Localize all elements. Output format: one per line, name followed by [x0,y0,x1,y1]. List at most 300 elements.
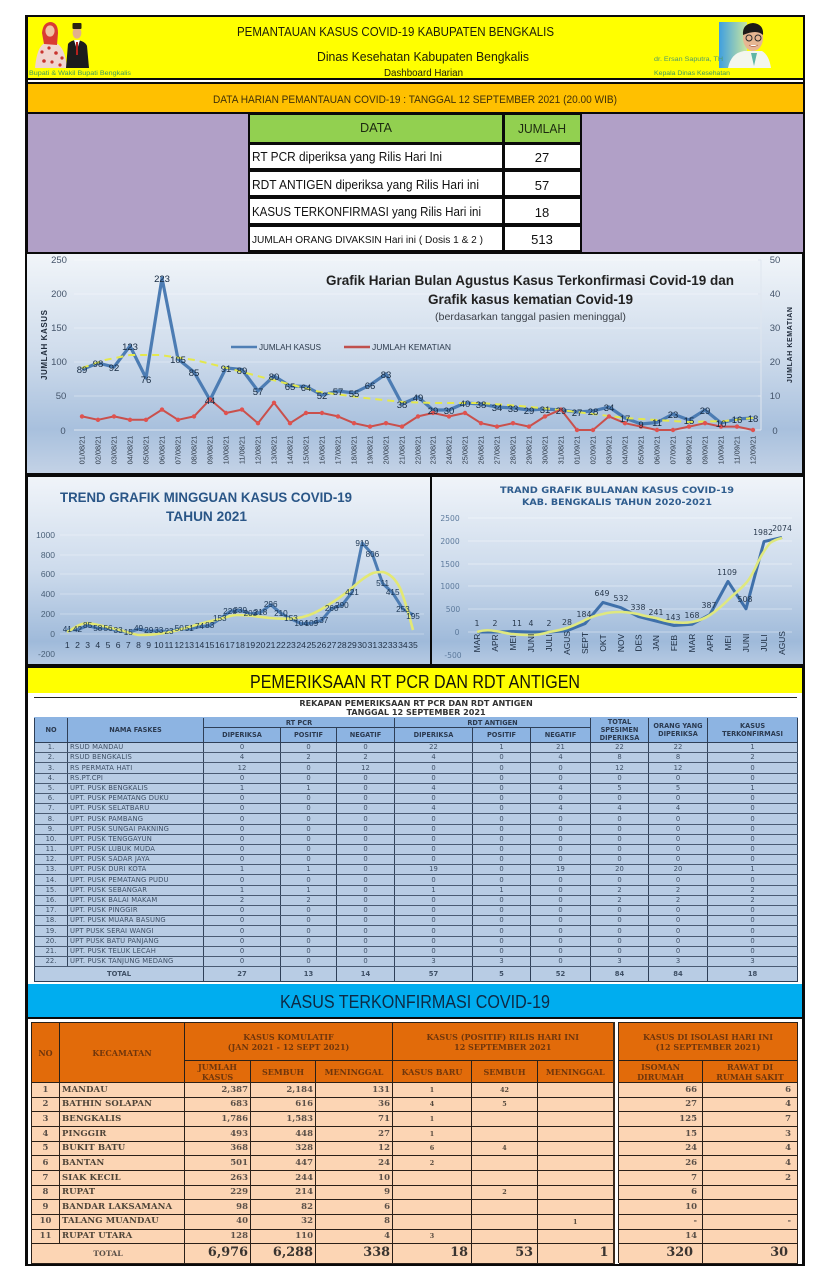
x axis week numbers: 2 [75,640,80,650]
y axis labels: 0 [50,629,55,639]
row: kasus terkonfirmasi: KASUS TERKONFIRMASI yang Rilis Hari ini [252,204,481,219]
data labels: jumlah kasus: 16 [732,415,742,426]
table: rekapan pemeriksaan: 0 [750,855,755,863]
data labels: jumlah kasus: 34 [492,403,502,414]
line: trend kasus [82,355,753,422]
table: rekapan pemeriksaan: 84 [615,970,624,978]
panel: daily summary table [28,114,803,252]
table: rekapan pemeriksaan: UPT. PUSK BALAI MAKAM [70,896,157,904]
table: kasus per kecamatan: 14 [685,1231,697,1241]
table: rekapan pemeriksaan: 17. [46,906,56,914]
table: rekapan pemeriksaan: 0 [558,896,563,904]
table: rekapan pemeriksaan: 22. [46,957,56,965]
data labels: weekly: 58 [93,624,103,633]
data labels: weekly: 203 [244,609,258,618]
table: rekapan pemeriksaan: 0 [750,835,755,843]
table: kasus per kecamatan: 1,786 [221,1114,248,1124]
table: rekapan pemeriksaan: 2 [617,896,622,904]
right axis labels: 20 [770,357,780,368]
data labels: weekly: 153 [284,614,298,623]
header band [28,17,803,82]
x axis month labels: JUNI [526,634,536,652]
x axis date labels: 15/08/21 [302,436,310,464]
x axis week numbers: 8 [136,640,141,650]
table: rekapan pemeriksaan: 0 [240,876,244,884]
data labels: weekly: 195 [406,612,420,621]
table: kasus per kecamatan: KASUS (POSITIF) RILIS HARI INI [427,1032,579,1042]
table: rekapan pemeriksaan: 0 [431,927,436,935]
table: rekapan pemeriksaan: 15. [46,886,56,894]
table: rekapan pemeriksaan: 0 [240,906,244,914]
table: rekapan pemeriksaan: 20. [46,937,56,945]
x axis date labels: 03/08/21 [110,436,118,464]
chart title [500,486,734,508]
table: rekapan pemeriksaan: 0 [617,927,622,935]
table: rekapan pemeriksaan: 1 [306,784,311,792]
line: monthly trend [477,538,782,635]
x axis month labels: JULI [759,634,769,652]
x axis week numbers: 28 [337,640,347,650]
legend: jumlah kasus [231,343,321,352]
x axis month labels: AGUS [777,631,787,655]
x axis week numbers: 24 [296,640,306,650]
table: rekapan pemeriksaan: 0 [558,825,563,833]
data labels: weekly: 296 [264,600,278,609]
data labels: monthly: 184 [577,610,591,619]
table: rekapan pemeriksaan: 4 [431,753,436,761]
table: rekapan pemeriksaan: 0 [617,774,622,782]
left axis labels: 250 [51,255,67,266]
caption: bupati: Bupati & Wakil Bupati Bengkalis [29,70,132,77]
table: rekapan pemeriksaan: 0 [499,774,504,782]
y axis labels: -500 [444,651,462,660]
table: rekapan pemeriksaan: 0 [240,947,244,955]
table: rekapan pemeriksaan: 0 [431,814,436,822]
table: rekapan pemeriksaan: 0 [499,855,504,863]
table: kasus per kecamatan: SEMBUH [484,1066,526,1076]
table: rekapan pemeriksaan: NAMA FASKES [109,726,162,734]
table: rekapan pemeriksaan: 4 [558,753,563,761]
y axis labels: 600 [41,569,55,579]
data labels: jumlah kasus: 29 [524,406,534,417]
table: rekapan pemeriksaan: 0 [558,845,563,853]
table: kasus per kecamatan: 328 [295,1143,313,1153]
caption: doctor position: Kepala Dinas Kesehatan [654,70,730,77]
table: kasus per kecamatan: 27 [685,1099,697,1109]
x axis week numbers: 23 [286,640,296,650]
table: kasus per kecamatan: 8 [43,1187,48,1197]
line: monthly cases [477,537,782,632]
data labels: jumlah kasus: 223 [154,274,170,285]
table: rekapan pemeriksaan: 0 [431,906,436,914]
table: rekapan pemeriksaan: 5 [676,784,680,792]
x axis date labels: 16/08/21 [318,436,326,464]
table: kasus per kecamatan: 7 [691,1173,697,1183]
table: rekapan pemeriksaan: 0 [499,927,504,935]
table: rekapan pemeriksaan: 0 [499,906,504,914]
x axis date labels: 09/09/21 [700,436,710,464]
table: rekapan pemeriksaan: 0 [306,804,311,812]
table: rekapan pemeriksaan: 0 [750,774,755,782]
table: rekapan pemeriksaan: UPT. PUSK BENGKALIS [70,784,148,792]
table: rekapan pemeriksaan: 6. [48,794,54,802]
table: rekapan pemeriksaan: 0 [306,957,311,965]
table: rekapan pemeriksaan: 21. [46,947,56,955]
table: rekapan pemeriksaan: 0 [676,876,680,884]
table: kasus per kecamatan: 12 [378,1143,390,1153]
table: rekapan pemeriksaan: 0 [558,794,563,802]
data labels: monthly: 508 [738,595,752,604]
x axis week numbers: 20 [256,640,265,650]
table: rekapan pemeriksaan: 0 [617,825,622,833]
table: kasus per kecamatan: 24 [685,1143,697,1153]
table: rekapan pemeriksaan: 0 [363,845,368,853]
x axis date labels: 03/09/21 [604,436,614,464]
table: rekapan pemeriksaan: 7. [48,804,54,812]
table: rekapan pemeriksaan: 2. [48,753,54,761]
data labels: monthly: 2 [547,619,552,628]
table: rekapan pemeriksaan: 0 [363,947,368,955]
table: rekapan pemeriksaan: 2 [306,753,311,761]
y axis labels: 500 [446,605,460,614]
table: rekapan pemeriksaan: 1. [48,743,54,751]
table: rekapan pemeriksaan: UPT. PUSK MUARA BASUNG [70,916,166,924]
row: jumlah divaksin: 513 [531,232,553,247]
data labels: jumlah kasus: 23 [668,410,678,421]
x axis month labels: NOV [616,634,626,652]
table: rekapan pemeriksaan: 20 [615,865,624,873]
table: kasus per kecamatan: 98 [236,1202,248,1212]
x axis month labels: MAR [472,634,482,652]
table: kasus per kecamatan: 1 [600,1245,609,1260]
data labels: weekly: 33 [114,626,123,635]
table: rekapan pemeriksaan: 0 [558,916,563,924]
row: RDT antigen: RDT ANTIGEN diperiksa yang Rilis Hari ini [252,177,479,192]
table: rekapan pemeriksaan: 0 [499,947,504,955]
table: rekapan pemeriksaan: UPT. PUSK SEBANGAR [70,886,147,894]
x axis date labels: 30/08/21 [540,436,550,464]
table: rekapan pemeriksaan: 0 [750,804,755,812]
table: rekapan pemeriksaan: 0 [306,927,311,935]
table: kasus per kecamatan: BUKIT BATU [62,1143,125,1153]
data labels: weekly: 49 [134,624,143,633]
table: rekapan pemeriksaan: 0 [431,855,436,863]
table: rekapan pemeriksaan: 0 [750,814,755,822]
data labels: jumlah kasus: 83 [381,370,391,381]
table: rekapan pemeriksaan: 0 [676,927,680,935]
table: rekapan pemeriksaan: 13. [46,865,56,873]
x axis week numbers: 21 [266,640,276,650]
x axis week numbers [65,640,418,650]
table: rekapan pemeriksaan: 19 [429,865,438,873]
table: rekapan pemeriksaan: 0 [363,855,368,863]
table: rekapan pemeriksaan: RSUD BENGKALIS [70,753,132,761]
table: rekapan pemeriksaan: 0 [431,835,436,843]
x axis date labels: 08/09/21 [684,436,694,464]
data labels: jumlah kasus: 40 [460,399,470,410]
data labels: monthly: 338 [631,603,645,612]
data labels: monthly [475,524,792,628]
table: rekapan pemeriksaan: 2 [676,886,680,894]
table: rekapan pemeriksaan: 27 [237,970,247,978]
legend: jumlah kasus: JUMLAH KASUS [259,343,321,352]
table: rekapan pemeriksaan: 0 [499,845,504,853]
table: rekapan pemeriksaan: 8 [617,753,622,761]
data labels: weekly: 85 [83,621,93,630]
table: rekapan pemeriksaan: 1 [240,865,244,873]
table: rekapan pemeriksaan: 0 [558,835,563,843]
table: kasus per kecamatan: 11 [40,1231,51,1241]
table: rekapan pemeriksaan: 0 [431,774,436,782]
x axis date labels: 06/08/21 [158,436,166,464]
table: rekapan pemeriksaan: 3. [48,764,54,772]
table: kasus per kecamatan: 4 [43,1129,48,1139]
table: kasus per kecamatan: 3 [785,1129,791,1139]
data labels: jumlah kasus: 49 [413,393,423,404]
table: rekapan pemeriksaan: 3 [499,957,504,965]
table: rekapan pemeriksaan: 0 [363,865,368,873]
data labels: weekly: 806 [366,550,380,559]
section heading: kasus terkonfirmasi [28,984,802,1017]
table: rekapan pemeriksaan: 0 [499,835,504,843]
x axis week numbers: 25 [307,640,316,650]
table: rekapan pemeriksaan: 0 [499,825,504,833]
table: rekapan pemeriksaan: 2 [750,886,755,894]
chart title: TRAND GRAFIK BULANAN KASUS COVID-19 [500,486,734,496]
table: rekapan pemeriksaan: UPT. PUSK SELATBARU [70,804,149,812]
table: rekapan pemeriksaan: 0 [240,835,244,843]
table: rekapan pemeriksaan: 0 [431,845,436,853]
table: rekapan pemeriksaan: 4 [558,804,563,812]
table: rekapan pemeriksaan: 0 [617,937,622,945]
x axis date labels: 26/08/21 [476,436,486,464]
x axis week numbers: 15 [205,640,215,650]
data labels: monthly: 11 [512,619,522,628]
table: kasus per kecamatan: - [694,1216,697,1226]
chart: monthly trend [432,477,803,664]
table: kasus per kecamatan: 4 [785,1143,791,1153]
table: kasus per kecamatan: MANDAU [62,1085,108,1095]
data labels: monthly: 532 [614,594,628,603]
table: kasus per kecamatan: 10 [685,1202,697,1212]
table: rekapan pemeriksaan: 0 [750,764,755,772]
data labels: jumlah kasus: 28 [588,407,598,418]
table: rekapan pemeriksaan: 0 [750,876,755,884]
x axis month labels: JUNI [741,634,751,652]
data labels: jumlah kasus: 76 [141,375,151,386]
table: kasus per kecamatan: 1 [43,1085,48,1095]
table: rekapan pemeriksaan: 0 [499,784,504,792]
table: kasus per kecamatan: BANTAN [62,1158,104,1168]
row: RT PCR: RT PCR diperiksa yang Rilis Hari Ini [252,149,442,164]
x axis date labels: 28/08/21 [508,436,518,464]
x axis week numbers: 3 [85,640,90,650]
table: rekapan pemeriksaan: 4 [676,804,680,812]
x axis date labels: 11/09/21 [732,436,742,464]
data labels: jumlah kasus: 30 [444,406,454,417]
table: rekapan pemeriksaan: 0 [363,896,368,904]
table: rekapan pemeriksaan: 0 [306,876,311,884]
data labels: weekly: 511 [376,579,390,588]
table: kasus per kecamatan: 4 [785,1158,791,1168]
x axis month labels: MEI [508,636,518,650]
y axis labels: 0 [455,628,460,637]
table: rekapan pemeriksaan: 0 [363,825,368,833]
table: rekapan pemeriksaan: 0 [240,855,244,863]
x axis date labels: 04/09/21 [620,436,630,464]
table: rekapan pemeriksaan: 1 [240,886,244,894]
right axis labels: 30 [770,323,780,334]
y axis labels: 1000 [440,582,460,591]
table: kasus per kecamatan: 501 [230,1158,248,1168]
x axis date labels: 27/08/21 [492,436,502,464]
table: rekapan pemeriksaan: 2 [750,896,755,904]
x axis week numbers: 32 [378,640,388,650]
table: rekapan pemeriksaan: 0 [499,865,504,873]
right axis labels [770,255,780,437]
table: rekapan pemeriksaan: 0 [676,774,680,782]
table: rekapan pemeriksaan: NEGATIF [350,731,381,739]
table: rekapan pemeriksaan: POSITIF [294,731,323,739]
x axis date labels: 07/09/21 [668,436,678,464]
x axis week numbers: 9 [146,640,151,650]
x axis date labels: 01/09/21 [572,436,582,464]
y axis labels: 2500 [440,514,460,523]
table: rekapan pemeriksaan: 0 [240,794,244,802]
table: rekapan pemeriksaan: 0 [306,764,311,772]
table: kasus per kecamatan: 1 [573,1218,578,1226]
table: rekapan pemeriksaan: 0 [558,855,563,863]
data labels: jumlah kasus: 57 [333,387,343,398]
data labels: jumlah kasus: 31 [540,405,550,416]
table: rekapan pemeriksaan: 11. [46,845,56,853]
data labels: weekly: 153 [213,614,227,623]
x axis date labels: 31/08/21 [556,436,566,464]
table: rekapan pemeriksaan: 0 [617,794,622,802]
data labels: weekly: 239 [233,606,247,615]
x axis week numbers: 19 [246,640,255,650]
table: kasus per kecamatan: (12 SEPTEMBER 2021) [656,1042,760,1052]
table: kasus per kecamatan: 10 [40,1216,51,1226]
table: rekapan pemeriksaan: 57 [429,970,438,978]
table: rekapan pemeriksaan: 4 [240,753,244,761]
table: rekapan pemeriksaan: 0 [676,855,680,863]
table: rekapan pemeriksaan: 4 [431,804,436,812]
table: kasus per kecamatan: BATHIN SOLAPAN [62,1099,152,1109]
table: kasus per kecamatan: MENINGGAL [325,1066,383,1076]
table: rekapan pemeriksaan: 19 [556,865,565,873]
table: rekapan pemeriksaan: 0 [499,937,504,945]
table: rekapan pemeriksaan: RSUD MANDAU [70,743,123,751]
table: rekapan pemeriksaan: 0 [676,794,680,802]
data labels: jumlah kasus: 89 [77,365,87,376]
table: rekapan pemeriksaan: 5 [617,784,622,792]
data labels: weekly: 51 [185,624,194,633]
x axis date labels: 09/08/21 [206,436,214,464]
data labels: weekly: 260 [325,604,339,613]
table: kasus per kecamatan: 3 [43,1114,48,1124]
right axis labels: 0 [772,426,778,437]
table: kasus per kecamatan: 616 [295,1099,313,1109]
data labels: weekly: 83 [205,621,215,630]
table: rekapan pemeriksaan: 16. [46,896,56,904]
left axis title: JUMLAH KASUS [40,309,49,380]
table: rekapan pemeriksaan: 0 [499,794,504,802]
data labels: weekly: 74 [195,622,204,631]
x axis date labels: 12/09/21 [748,436,758,464]
x axis date labels: 10/08/21 [222,436,230,464]
x axis date labels: 12/08/21 [254,436,262,464]
table: kasus per kecamatan: (JAN 2021 - 12 SEPT 2021) [228,1042,349,1052]
y axis labels: 200 [41,609,55,619]
data labels: monthly: 387 [702,601,716,610]
table: kasus per kecamatan: NO [38,1048,53,1058]
y axis labels: -200 [38,649,55,659]
panel background: kecamatan table [28,1019,802,1264]
table: kasus per kecamatan: ISOMAN [641,1062,680,1072]
table: rekapan pemeriksaan: 0 [558,876,563,884]
table: rekapan pemeriksaan: 0 [499,814,504,822]
header title: PEMANTAUAN KASUS COVID-19 KABUPATEN BENGKALIS [237,25,554,39]
table: rekapan pemeriksaan: 4. [48,774,54,782]
table: rekapan pemeriksaan: ORANG YANG DIPERIKSA [653,722,703,738]
table: kasus per kecamatan: BENGKALIS [62,1114,121,1124]
x axis week numbers: 12 [174,640,184,650]
table: rekapan pemeriksaan: 0 [363,916,368,924]
x axis month labels: MEI [723,636,733,650]
table: rekapan pemeriksaan: 2 [617,886,622,894]
table: rekapan pemeriksaan: 0 [431,937,436,945]
table: rekapan pemeriksaan: 0 [499,896,504,904]
table: rekapan pemeriksaan: 0 [617,876,622,884]
table: rekapan pemeriksaan: 0 [363,876,368,884]
table: rekapan pemeriksaan: 21 [556,743,565,751]
table: kasus per kecamatan: SIAK KECIL [62,1173,121,1183]
table: rekapan pemeriksaan: TERKONFIRMASI [722,730,783,738]
table: kasus per kecamatan: 4 [384,1231,390,1241]
table: rekapan pemeriksaan: 52 [556,970,565,978]
data labels: weekly: 104 [294,619,308,628]
x axis week numbers: 13 [185,640,194,650]
table: kasus per kecamatan: 15 [685,1129,697,1139]
table: kasus per kecamatan: 36 [378,1099,390,1109]
data labels: jumlah kasus: 44 [205,396,215,407]
table: rekapan pemeriksaan: 0 [558,886,563,894]
table: kasus per kecamatan: 2 [502,1188,507,1196]
chart title: Grafik kasus kematian Covid-19 [428,291,633,307]
table: kasus per kecamatan: 10 [378,1173,390,1183]
data labels: jumlah kasus: 105 [170,355,186,366]
table: rekapan pemeriksaan: 0 [306,743,311,751]
table: rekapan pemeriksaan: 0 [431,896,436,904]
x axis date labels: 08/08/21 [190,436,198,464]
table: kasus per kecamatan: 8 [384,1216,390,1226]
x axis week numbers: 29 [347,640,357,650]
table: rekapan pemeriksaan: 0 [750,937,755,945]
table header: jumlah: JUMLAH [518,122,566,136]
table: rekapan pemeriksaan: REKAPAN PEMERIKSAAN RT PCR DAN RDT ANTIGEN [299,698,533,708]
data labels: weekly: 290 [335,601,349,610]
row: RT PCR [250,145,580,168]
table: kasus per kecamatan: SEMBUH [262,1066,304,1076]
table: kasus per kecamatan: 12 SEPTEMBER 2021 [454,1042,551,1052]
table: kasus per kecamatan: 1,583 [286,1114,313,1124]
x axis date labels: 29/08/21 [524,436,534,464]
data labels: jumlah kasus: 38 [397,400,407,411]
table: kasus per kecamatan: 6,288 [273,1245,313,1260]
table: rekapan pemeriksaan: 0 [676,825,680,833]
data labels: monthly: 143 [666,613,680,622]
